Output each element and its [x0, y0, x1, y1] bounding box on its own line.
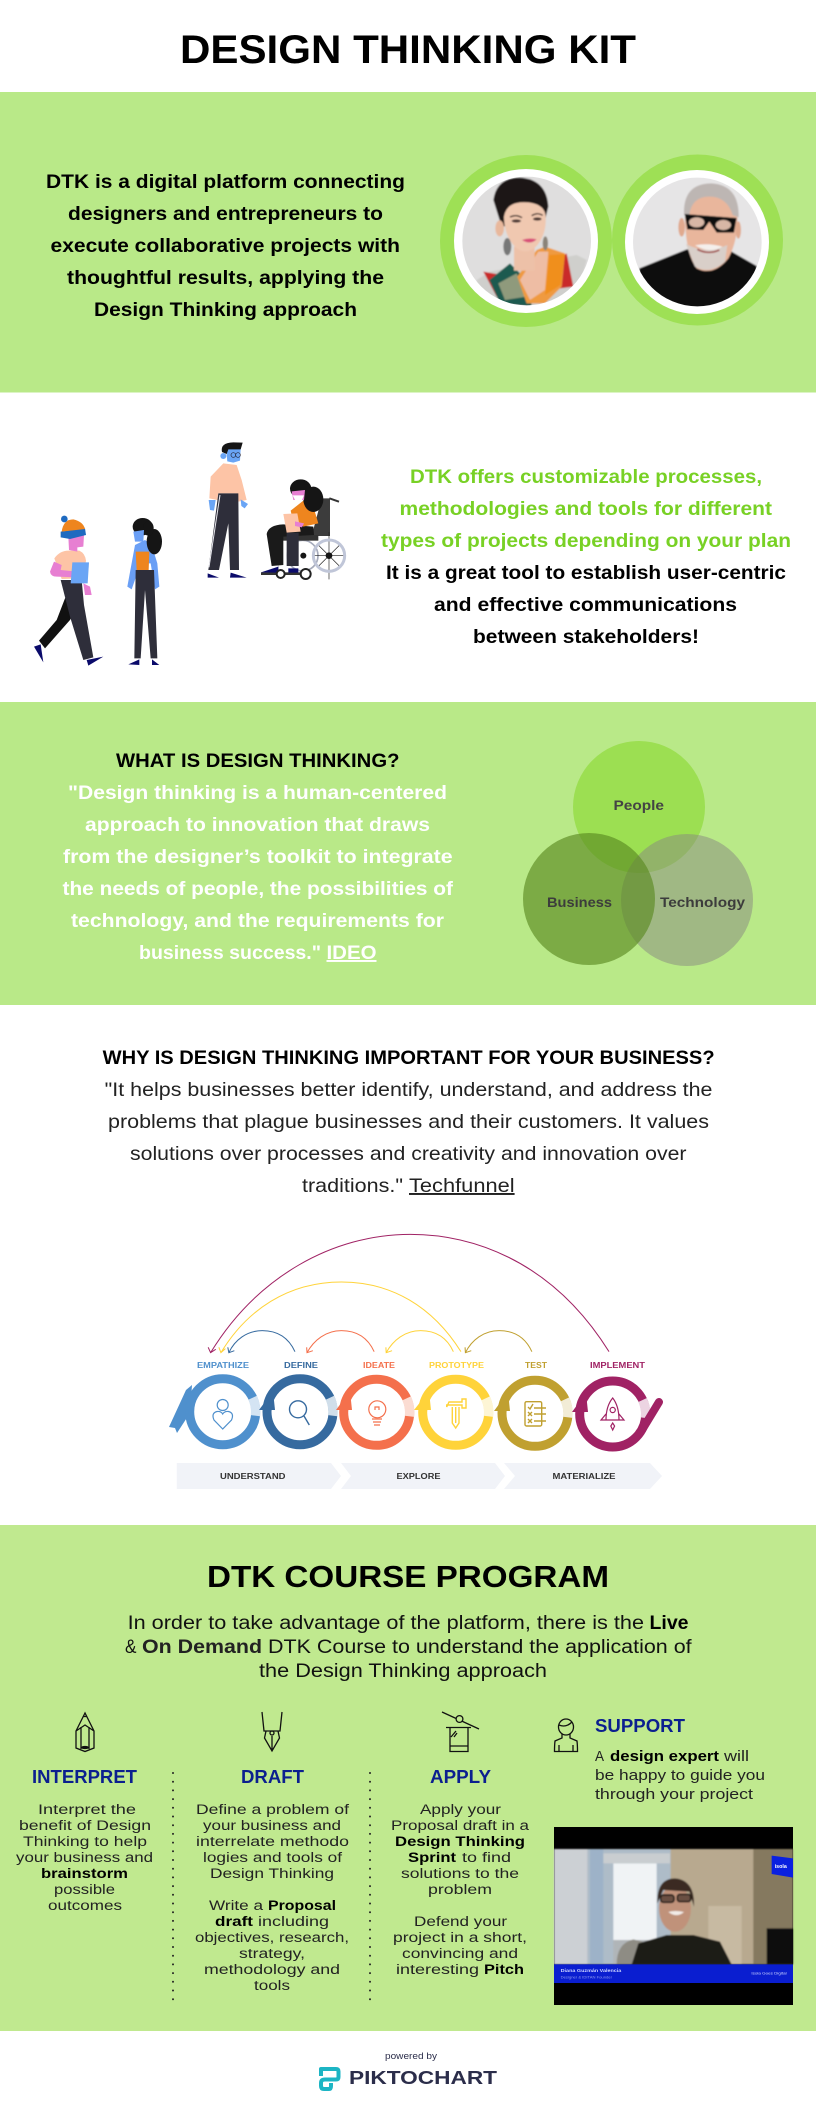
figure: standing man with glasses [208, 442, 248, 578]
column: support: be happy to guide you [595, 1768, 765, 1784]
column: draft: DRAFT [241, 1767, 304, 1787]
text block: DTK offers: between stakeholders! [473, 626, 699, 648]
stage: ideate [333, 1361, 421, 1456]
column: draft: Write a [209, 1898, 264, 1913]
column: apply: Proposal draft in a [391, 1818, 530, 1833]
icon: podium [442, 1712, 479, 1752]
stage: implement: IMPLEMENT [590, 1361, 645, 1370]
phase bands: UNDERSTAND [220, 1472, 286, 1481]
video still: Diana Guzmán Valencia [561, 1968, 622, 1973]
text block: why is design thinking important: Techfunnel [409, 1175, 515, 1197]
column: support: will [723, 1749, 749, 1765]
phase bands: EXPLORE [396, 1472, 441, 1481]
icon: Piktochart logo [321, 2069, 338, 2089]
quote text: technology, and the requirements for [71, 910, 444, 932]
column: apply: Design Thinking [395, 1834, 525, 1849]
text block: DTK offers: It is a great tool to establish user-centric [386, 562, 786, 584]
video still [554, 1827, 793, 2005]
stage: define: DEFINE [284, 1361, 319, 1370]
text block: DTK offers [381, 466, 791, 648]
panel: DTK course program [0, 1525, 816, 2031]
footer: powered by Piktochart [321, 2051, 497, 2089]
text block: why is design thinking important: problems that plague businesses and their customers. It values [108, 1111, 709, 1133]
venn diagram: People [614, 797, 664, 813]
column: draft: objectives, research, [195, 1930, 349, 1945]
intro text: designers and entrepreneurs to [68, 203, 383, 225]
column: support: SUPPORT [595, 1716, 685, 1736]
footer: powered by Piktochart: PIKTOCHART [349, 2068, 497, 2088]
column: apply: interesting [396, 1962, 479, 1977]
quote text: from the designer’s toolkit to integrate [63, 846, 453, 868]
column: draft: draft [215, 1914, 254, 1929]
course intro text: DTK Course to understand the application of [268, 1637, 692, 1658]
intro text: Design Thinking approach [94, 299, 357, 321]
video still: Designer & IDITAN Founder [561, 1975, 613, 1979]
text block: why is design thinking important: WHY IS DESIGN THINKING IMPORTANT FOR YOUR BUSINESS? [103, 1047, 715, 1069]
column: draft: methodology and [204, 1962, 340, 1977]
column: support: design expert [610, 1749, 719, 1765]
stage: empathize [169, 1361, 267, 1456]
video still: Isola Goes Digital [751, 1970, 787, 1975]
course intro text: & [125, 1637, 137, 1658]
heading: DTK COURSE PROGRAM [207, 1559, 609, 1594]
stage: empathize: EMPATHIZE [197, 1361, 250, 1370]
column: interpret [16, 1713, 153, 1913]
column: draft: Design Thinking [210, 1866, 334, 1881]
course intro text [125, 1613, 692, 1682]
venn diagram: Technology [660, 894, 745, 910]
phase bands: MATERIALIZE [552, 1472, 616, 1481]
quote text: "Design thinking is a human-centered [68, 782, 447, 804]
quote text [62, 782, 454, 964]
intro text: DTK is a digital platform connecting [46, 171, 405, 193]
panel: introduction [0, 92, 816, 392]
column: draft: tools [254, 1978, 290, 1993]
text block: DTK offers: types of projects depending on your plan [381, 530, 791, 552]
column: interpret: possible [54, 1882, 115, 1897]
text block: DTK offers: and effective communications [434, 594, 737, 616]
column: apply: Defend your [414, 1914, 508, 1929]
column: apply: problem [428, 1882, 492, 1897]
text block: DTK offers: DTK offers customizable processes, [410, 466, 762, 488]
stage: prototype [412, 1361, 500, 1456]
panel: what is design thinking [0, 702, 816, 1005]
stage: implement [569, 1361, 659, 1458]
intro text [46, 171, 405, 321]
column: interpret: outcomes [48, 1898, 122, 1913]
column: interpret: benefit of Design [19, 1818, 151, 1833]
column: draft: including [258, 1914, 329, 1929]
quote text: business success." [139, 942, 321, 964]
column: support: A [595, 1749, 604, 1765]
column: apply: APPLY [430, 1767, 491, 1787]
column: apply: convincing and [402, 1946, 518, 1961]
venn diagram: Business [547, 894, 612, 910]
course intro text: In order to take advantage of the platform, there is the [128, 1613, 644, 1634]
stage: define [256, 1361, 344, 1456]
column: apply: to find [462, 1850, 511, 1865]
stage: test: TEST [525, 1361, 547, 1370]
column: support [554, 1716, 793, 2005]
column: draft: interrelate methodo [196, 1834, 349, 1849]
column: apply: Apply your [420, 1802, 502, 1817]
figure: walking person with tablet [34, 516, 103, 666]
stage: test [491, 1361, 579, 1457]
text block: why is design thinking important: solutions over processes and creativity and innovation over [130, 1143, 687, 1165]
column: support: through your project [595, 1787, 753, 1803]
column: apply [391, 1712, 530, 1977]
diagram: design thinking process [169, 1234, 662, 1489]
course intro text: Live [650, 1613, 688, 1634]
course intro text: On Demand [142, 1637, 262, 1658]
column: apply: project in a short, [393, 1930, 527, 1945]
column: interpret: Interpret the [38, 1802, 136, 1817]
feedback arrows [208, 1234, 609, 1353]
illustration: diverse people [34, 442, 345, 666]
portrait: man [612, 154, 783, 326]
column: interpret: your business and [16, 1850, 153, 1865]
heading: WHAT IS DESIGN THINKING? [116, 750, 400, 772]
venn diagram [523, 741, 753, 966]
text block: DTK offers: methodologies and tools for different [400, 498, 773, 520]
intro text: thoughtful results, applying the [67, 267, 384, 289]
text block: why is design thinking important: "It helps businesses better identify, understand, and address the [105, 1079, 712, 1101]
icon: support person [554, 1719, 578, 1752]
text block: why is design thinking important: traditions." [302, 1175, 403, 1197]
icon: pencil [76, 1713, 94, 1752]
course intro text: the Design Thinking approach [259, 1661, 547, 1682]
column: interpret: INTERPRET [32, 1767, 137, 1787]
quote text: the needs of people, the possibilities of [62, 878, 454, 900]
column: draft [195, 1712, 349, 1993]
portrait: woman [440, 155, 612, 327]
quote text: IDEO [326, 942, 376, 964]
column: interpret: Thinking to help [23, 1834, 147, 1849]
column: draft: Define a problem of [196, 1802, 349, 1817]
column: draft: your business and [203, 1818, 341, 1833]
text block: why is design thinking important [103, 1047, 715, 1197]
quote text: approach to innovation that draws [85, 814, 430, 836]
stage: prototype: PROTOTYPE [429, 1361, 485, 1370]
column: draft: Proposal [268, 1898, 336, 1913]
column: interpret: brainstorm [41, 1866, 128, 1881]
icon: pen nib [262, 1712, 282, 1751]
figure: standing woman [127, 518, 162, 665]
title: DESIGN THINKING KIT [180, 28, 636, 72]
intro text: execute collaborative projects with [50, 235, 400, 257]
figure: woman in wheelchair [261, 479, 345, 579]
stage: ideate: IDEATE [363, 1361, 396, 1370]
column: apply: Pitch [484, 1962, 524, 1977]
column: draft: logies and tools of [203, 1850, 342, 1865]
column: draft: strategy, [239, 1946, 305, 1961]
column: apply: Sprint [408, 1850, 457, 1865]
footer: powered by Piktochart: powered by [385, 2051, 437, 2062]
column: apply: solutions to the [401, 1866, 519, 1881]
video still: isola [775, 1864, 787, 1870]
phase bands [177, 1463, 662, 1489]
